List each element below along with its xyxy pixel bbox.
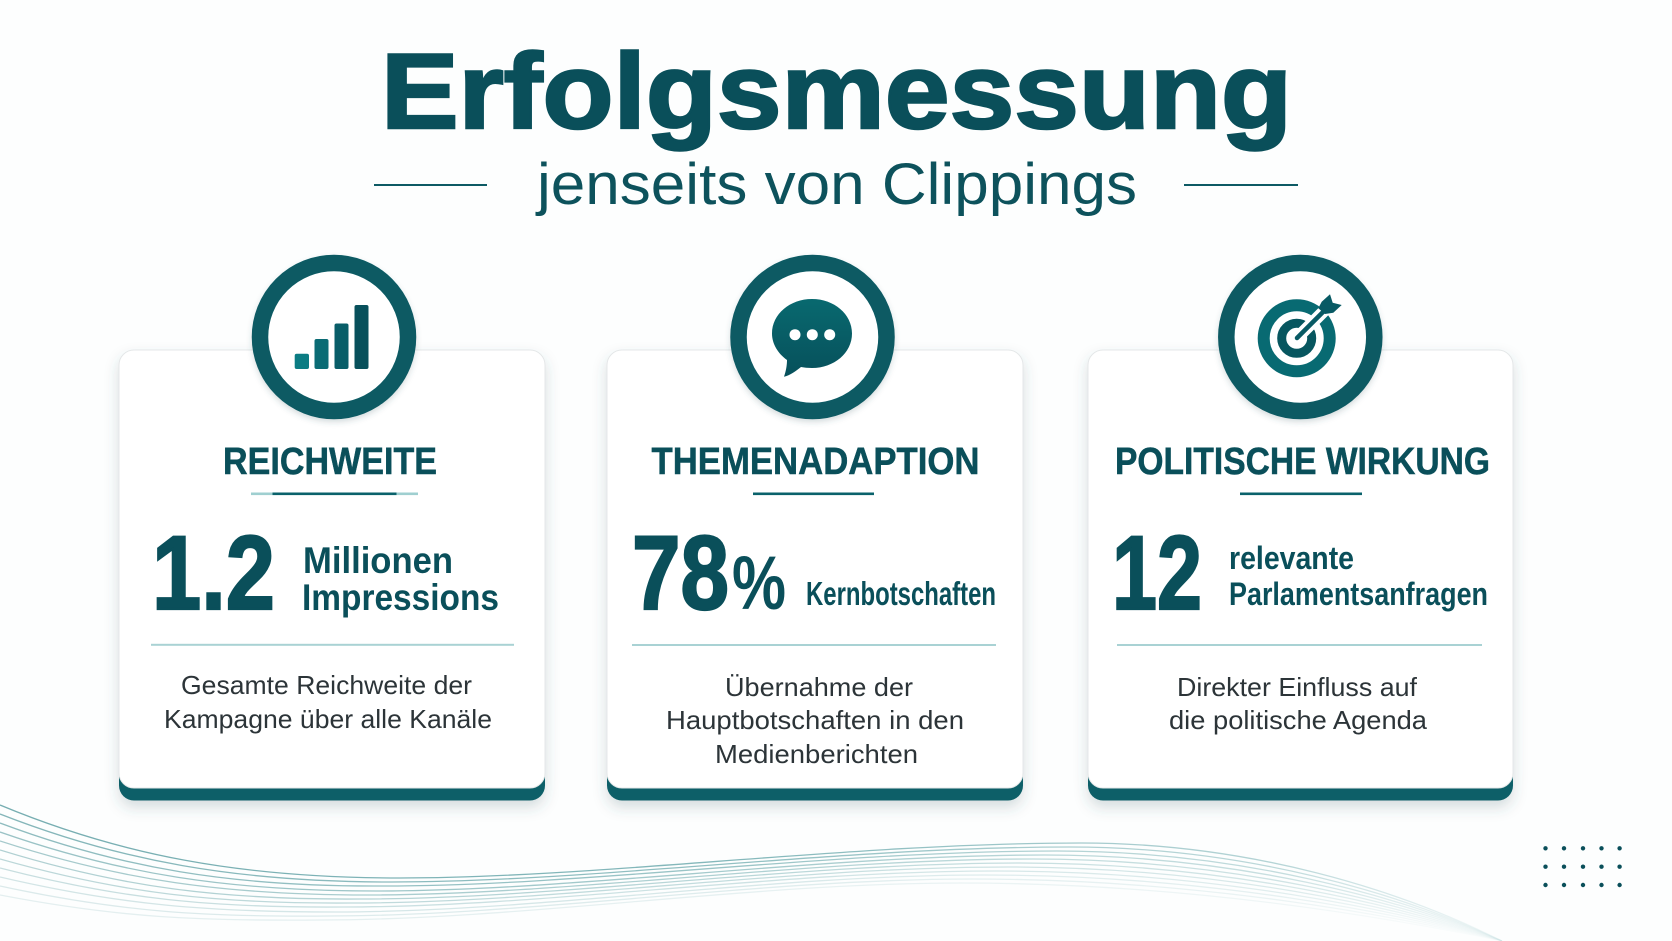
- heading: POLITISCHE WIRKUNG: [1115, 441, 1490, 483]
- icon: bar chart: [260, 263, 408, 411]
- icon: speech bubble: [738, 263, 886, 411]
- icon: target with arrow: [1226, 263, 1374, 411]
- metric: [1112, 515, 1488, 632]
- title: Erfolgsmessung: [381, 31, 1292, 151]
- description: Kampagne über alle Kanäle: [164, 704, 492, 734]
- description: [1169, 672, 1428, 735]
- panel: Reichweite: [119, 263, 545, 800]
- description: [666, 672, 964, 769]
- description: die politische Agenda: [1169, 705, 1428, 735]
- decorative wave lines: [0, 805, 1502, 941]
- card background: [119, 350, 545, 800]
- metric: Millionen: [303, 540, 453, 581]
- metric: [632, 515, 996, 632]
- heading: REICHWEITE: [223, 441, 437, 483]
- metric: Parlamentsanfragen: [1229, 576, 1488, 612]
- metric: 78: [632, 515, 729, 632]
- decorative dot grid: [1543, 846, 1622, 887]
- heading: THEMENADAPTION: [652, 441, 980, 483]
- description: Gesamte Reichweite der: [181, 670, 472, 700]
- metric: Kernbotschaften: [806, 575, 996, 612]
- subtitle: jenseits von Clippings: [535, 152, 1137, 217]
- description: Medienberichten: [715, 739, 918, 769]
- card background: [1088, 350, 1513, 800]
- panel: Politische Wirkung: [1088, 263, 1513, 800]
- panel: Themenadaption: [607, 263, 1023, 800]
- description: [164, 670, 492, 734]
- metric: Impressions: [302, 577, 499, 618]
- metric: [152, 515, 499, 632]
- description: Übernahme der: [725, 672, 913, 702]
- metric: 1.2: [152, 515, 275, 632]
- description: Hauptbotschaften in den: [666, 705, 964, 735]
- card background: [607, 350, 1023, 800]
- description: Direkter Einfluss auf: [1177, 672, 1418, 702]
- metric: 12: [1112, 515, 1202, 632]
- metric: %: [732, 541, 786, 626]
- metric: relevante: [1229, 540, 1354, 576]
